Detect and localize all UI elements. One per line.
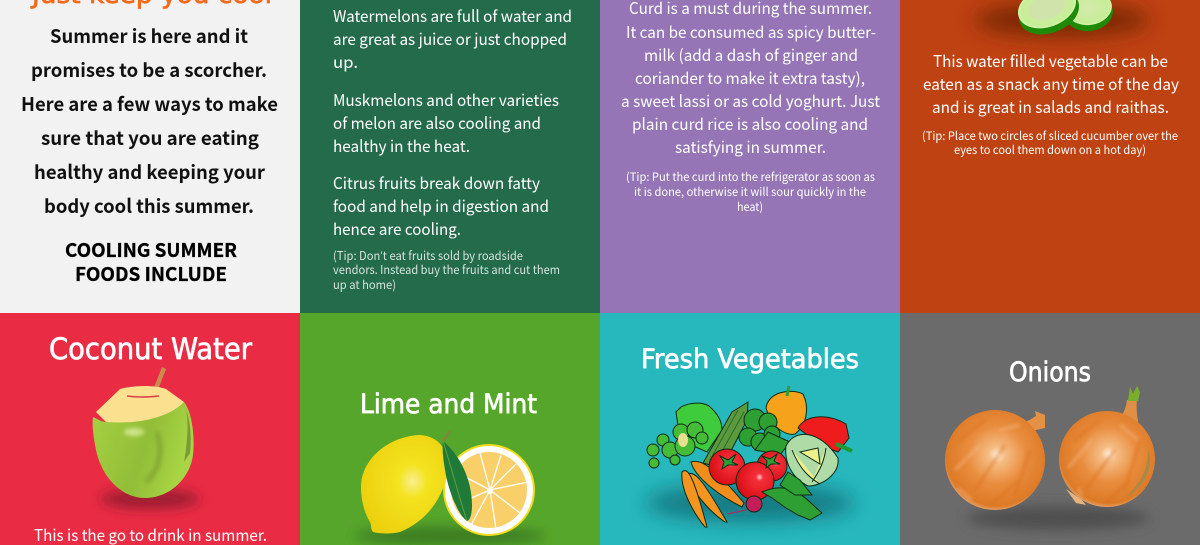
curd tip [626,169,875,215]
fruit tip: up at home) [333,276,396,293]
curd tip: (Tip: Put the curd into the refrigerator as soon as [626,169,875,185]
cabbage [786,434,838,486]
curd tip: heat) [737,199,763,215]
heading: Lime and Mint [360,389,537,420]
carrots [691,461,744,507]
curd text: a sweet lassi or as cold yoghurt. Just [621,88,880,112]
fruit text: Citrus fruits break down fatty [333,170,541,194]
panel: intro [0,0,300,313]
subheading: COOLING SUMMER [65,236,237,263]
icon: vegetables [645,386,855,527]
fruit text: up. [333,49,358,73]
intro text [21,22,278,219]
fruit text: Watermelons are full of water and [333,3,572,27]
icon: cucumber slices [974,0,1150,42]
cucumber text: eaten as a snack any time of the day [923,71,1180,95]
cucumber text: This water filled vegetable can be [933,48,1168,72]
green pepper [676,403,722,452]
icon: lemon and leaf [354,431,546,545]
panel: onions [900,313,1200,545]
herbs [762,488,822,520]
subheading: FOODS INCLUDE [75,260,227,287]
fruit text [333,3,572,240]
broccoli [739,409,790,455]
curd text: coriander to make it extra tasty), [635,65,865,89]
panel: curd [600,0,900,313]
right onion [1117,400,1139,426]
fruit text: food and help in digestion and [333,193,549,217]
panel: cucumber [900,0,1200,313]
intro text: Here are a few ways to make [21,90,278,117]
carrot tops [647,422,708,468]
cucumber tip: eyes to cool them down on a hot day) [954,142,1146,158]
asparagus [703,402,748,468]
fruit text: are great as juice or just chopped [333,26,567,50]
panel: fresh vegetables [600,313,900,545]
fruit text: healthy in the heat. [333,133,470,157]
cucumber text: and is great in salads and raithas. [932,94,1169,118]
cucumber text [923,48,1180,118]
panel: coconut water [0,313,300,545]
fruit tip: (Tip: Don’t eat fruits sold by roadside [333,247,523,264]
tomatoes [709,449,745,485]
cucumber tip: (Tip: Place two circles of sliced cucumber over the [922,128,1178,144]
red pepper [798,417,849,452]
fruit tip [333,247,560,293]
curd text: plain curd rice is also cooling and [632,111,868,135]
fruit tip: vendors. Instead buy the fruits and cut them [333,261,560,278]
fruit text: hence are cooling. [333,216,461,240]
left onion [1012,411,1045,440]
intro text: Summer is here and it [50,22,248,49]
orange pepper [766,391,807,434]
intro text: sure that you are eating [41,124,260,151]
subheading [65,236,237,287]
heading: Coconut Water [49,332,252,366]
heading: Fresh Vegetables [641,344,859,375]
icon: coconut [93,367,200,509]
fruit text: of melon are also cooling and [333,110,541,134]
cucumber tip [922,128,1178,158]
heading: Onions [1009,357,1091,388]
curd text: It can be consumed as spicy butter- [626,19,876,43]
panel: fruits [300,0,600,313]
radish [746,496,762,512]
intro text: promises to be a scorcher. [31,56,267,83]
curd text: milk (add a dash of ginger and [644,42,858,66]
intro text: healthy and keeping your [34,158,266,185]
curd tip: it is done, otherwise it will sour quickly in the [634,184,866,200]
curd text: satisfying in summer. [675,134,826,158]
intro text: body cool this summer. [44,192,254,219]
panel: lime and mint [300,313,600,545]
curd text [621,0,880,158]
fruit text: Muskmelons and other varieties [333,87,559,111]
icon: onions [945,386,1155,530]
